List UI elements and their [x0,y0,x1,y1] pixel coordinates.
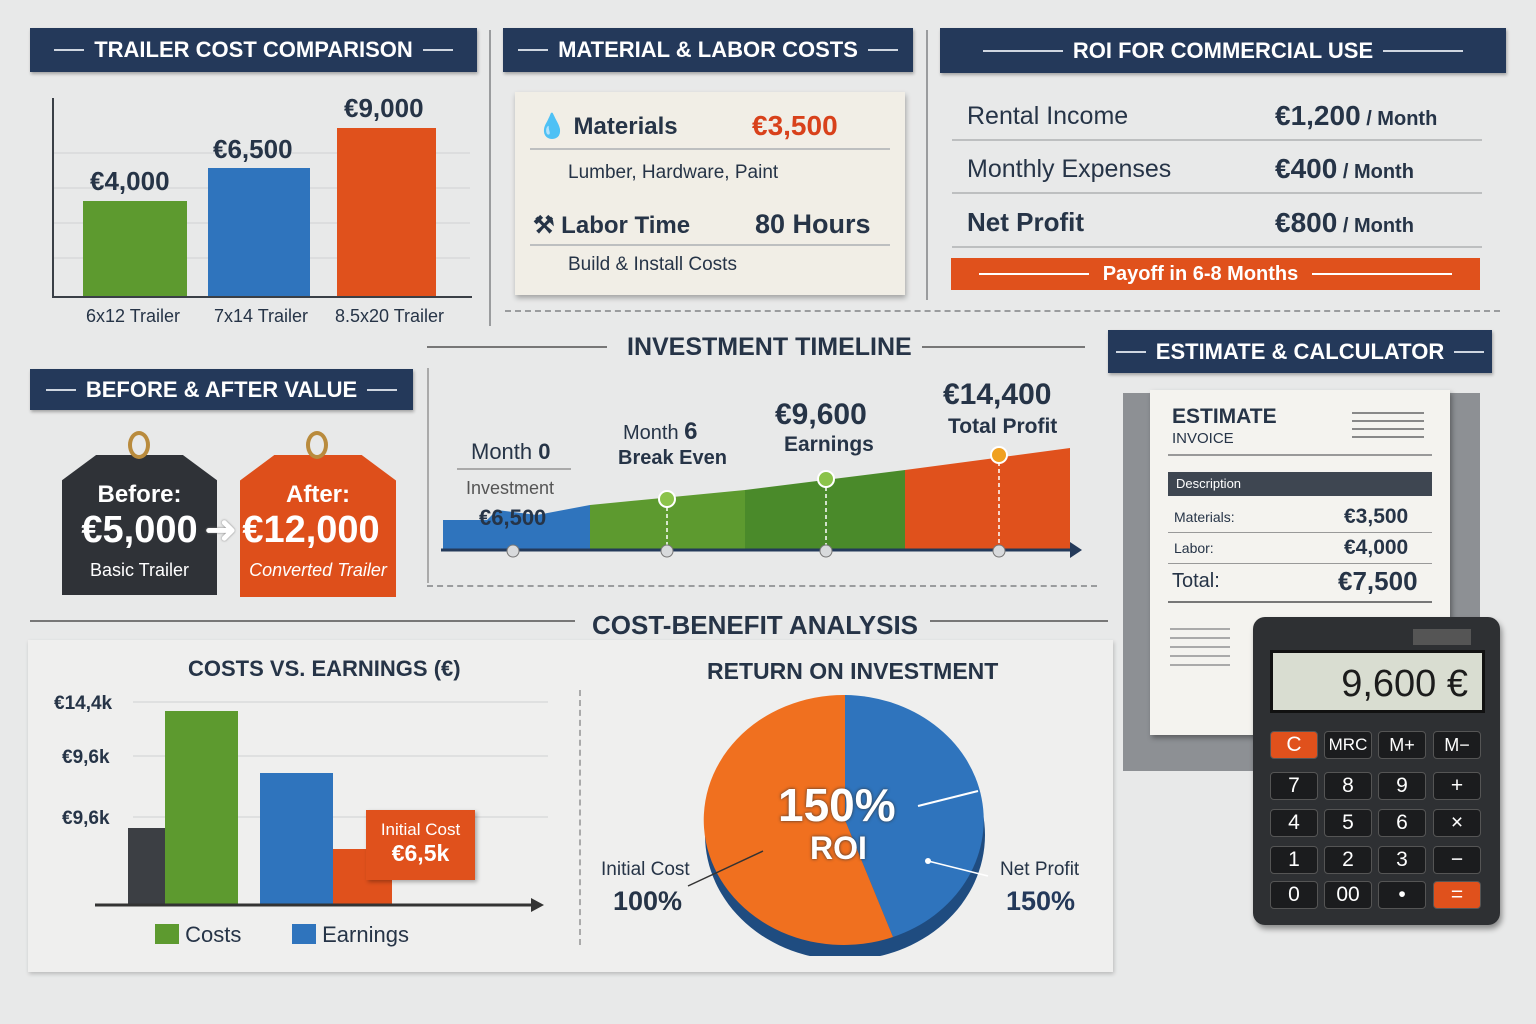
panel: material & labor costs [502,28,916,301]
panel: ROI for commercial use: €400 / Month [1275,153,1414,184]
panel: investment timeline: Investment [466,478,554,498]
panel: ROI for commercial use: €1,200 / Month [1275,100,1437,131]
pie chart: return on investment: RETURN ON INVESTMENT [707,658,998,684]
heading [30,28,477,72]
heading: MATERIAL & LABOR COSTS [558,37,858,62]
invoice: ESTIMATE [1172,405,1277,428]
panel: investment timeline: Total Profit [948,415,1057,438]
pie chart: return on investment: Net Profit [1000,859,1079,880]
calculator: 0 [1288,883,1300,906]
cost card: €3,500 [752,110,838,141]
calculator: 9,600 € [1341,663,1468,705]
panel: trailer cost comparison [29,28,480,326]
cost card: 💧 Materials [537,113,678,140]
invoice: INVOICE [1172,430,1234,447]
heading [30,369,413,410]
calculator: 9 [1396,774,1408,797]
tag: before: Before: [97,481,182,508]
heading [503,28,913,72]
payoff banner [951,258,1480,290]
panel: investment timeline: Break Even [618,447,727,469]
callout: initial cost: Initial Cost [381,820,460,839]
invoice: €3,500 [1344,505,1408,528]
calculator: • [1398,883,1406,906]
panel: ROI for commercial use: €800 / Month [1275,207,1414,238]
panel: ROI for commercial use: Monthly Expenses [967,155,1171,183]
calculator: 4 [1288,811,1300,834]
calculator: − [1451,848,1463,871]
heading: COST-BENEFIT ANALYSIS [592,610,918,640]
tag: before [62,455,217,595]
heading [1108,330,1492,373]
heading: BEFORE & AFTER VALUE [86,376,357,402]
legend: Costs [185,922,241,947]
bar chart: costs vs earnings: €9,6k [62,808,110,829]
invoice: €7,500 [1338,566,1418,596]
panel: ROI for commercial use: Net Profit [967,207,1084,237]
heading: ROI FOR COMMERCIAL USE [1073,38,1373,62]
pie chart: return on investment: 150% [778,779,896,831]
calculator: = [1451,883,1463,906]
timeline chart [441,446,1082,558]
panel: cost-benefit analysis [27,610,1116,976]
invoice: Materials: [1174,509,1235,525]
calculator: 3 [1396,848,1408,871]
bar chart: costs vs earnings [54,656,548,947]
invoice: Total: [1172,570,1220,592]
invoice: Description [1176,476,1241,491]
calculator: C [1286,733,1302,756]
calculator: 2 [1342,848,1354,871]
heading [940,28,1506,73]
calculator: 7 [1288,774,1300,797]
pie chart: return on investment: ROI [810,830,867,866]
calculator: 6 [1396,811,1408,834]
callout: initial cost: €6,5k [392,840,449,866]
panel: investment timeline: Month 0 [471,439,551,464]
panel: trailer cost comparison: 6x12 Trailer [86,306,180,326]
tag: before: €5,000 [81,509,198,551]
invoice: Labor: [1174,540,1214,556]
bar chart: costs vs earnings: €9,6k [62,747,110,768]
legend [155,922,241,947]
panel: before & after value [29,369,416,597]
cost card: Build & Install Costs [568,254,737,275]
cost card [515,92,905,295]
cost card: ⚒ Labor Time [533,212,690,239]
tag: after: Converted Trailer [249,560,387,580]
pie chart: return on investment: 100% [613,886,682,916]
bar chart: costs vs earnings: €14,4k [54,693,112,714]
panel: investment timeline: €9,600 [775,398,867,431]
pie chart: return on investment: Initial Cost [601,859,690,880]
calculator: + [1451,774,1463,797]
heading: TRAILER COST COMPARISON [94,37,413,62]
panel: investment timeline [427,333,1085,558]
pie chart: return on investment [601,658,1079,956]
calculator: × [1451,811,1463,834]
calculator: 8 [1342,774,1354,797]
tag: after: After: [286,481,350,508]
cost card: 80 Hours [755,209,871,239]
calculator: 00 [1336,883,1360,906]
cost card: Lumber, Hardware, Paint [568,162,778,183]
panel: investment timeline: Month 6 [623,418,698,445]
panel: estimate & calculator [1107,330,1506,933]
arrow: ➜ [204,508,238,552]
panel: ROI for commercial use [939,28,1509,290]
panel: investment timeline: Earnings [784,433,874,456]
calculator: 1 [1288,848,1300,871]
heading: INVESTMENT TIMELINE [627,333,912,361]
bar chart: costs vs earnings: COSTS VS. EARNINGS (€) [188,656,461,681]
panel: trailer cost comparison: €4,000 [90,166,170,196]
panel: trailer cost comparison: 8.5x20 Trailer [335,306,444,326]
panel: ROI for commercial use: Rental Income [967,102,1128,130]
pie chart: return on investment: 150% [1006,886,1075,916]
heading: ESTIMATE & CALCULATOR [1156,338,1444,364]
calculator [1253,617,1500,925]
bar chart: costs vs earnings: Earnings [322,922,409,947]
calculator: MRC [1329,735,1367,754]
panel: trailer cost comparison: €9,000 [344,93,424,123]
invoice: €4,000 [1344,536,1408,559]
panel: investment timeline: €14,400 [943,378,1051,411]
tag: before: Basic Trailer [90,560,189,580]
payoff banner: Payoff in 6-8 Months [1103,262,1298,284]
callout: initial cost [366,810,475,880]
calculator: 5 [1342,811,1354,834]
panel: trailer cost comparison: 7x14 Trailer [214,306,308,326]
bar chart [52,98,472,298]
tag: after [240,455,396,597]
panel: investment timeline: €6,500 [479,505,546,530]
tag: after: €12,000 [242,509,380,551]
panel: trailer cost comparison: €6,500 [213,134,293,164]
calculator: M− [1444,734,1470,754]
calculator: M+ [1389,734,1415,754]
invoice [1150,390,1450,735]
